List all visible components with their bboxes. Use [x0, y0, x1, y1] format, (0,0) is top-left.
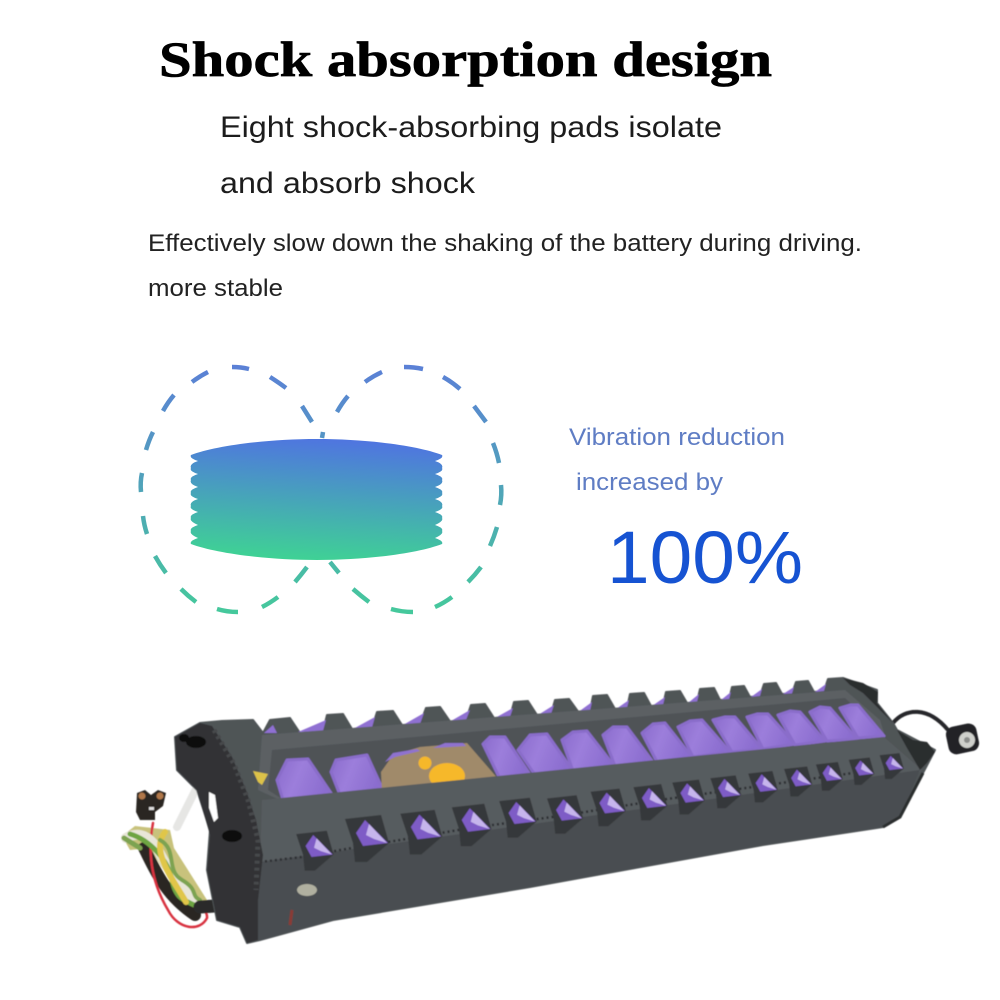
- description text: [148, 230, 862, 302]
- subtitle: eight shock-absorbing pads: and absorb shock: [220, 167, 476, 200]
- subtitle: eight shock-absorbing pads: Eight shock-absorbing pads isolate: [220, 111, 722, 144]
- description text: Effectively slow down the shaking of the battery during driving.: [148, 230, 862, 257]
- upper band shading: [258, 690, 885, 802]
- bead line: [260, 772, 860, 862]
- battery cell window: [277, 705, 884, 800]
- illustration: battery pack: [122, 678, 981, 943]
- title: Shock absorption design: [159, 31, 772, 87]
- description text: more stable: [148, 275, 283, 302]
- icon: dashed vibration rings: [141, 367, 501, 612]
- subtitle: eight shock-absorbing pads: [220, 111, 722, 200]
- callout: 100 percent: 100%: [607, 516, 803, 599]
- small label scuff: [297, 884, 317, 896]
- lower band with bead strip: [260, 737, 922, 865]
- left wire harness: [122, 787, 230, 927]
- callout: vibration reduction text: Vibration reduction: [569, 424, 785, 451]
- battery body: [175, 678, 935, 943]
- lower body: [240, 770, 920, 943]
- cell contact notches: [296, 753, 904, 871]
- red mark: [290, 910, 292, 925]
- callout: vibration reduction text: increased by: [576, 469, 724, 496]
- right end cap: [843, 678, 935, 827]
- left end cap: [175, 723, 263, 943]
- right cable and connector: [893, 712, 981, 756]
- icon: shock absorbing pad: [191, 439, 442, 560]
- upper cell slivers: [264, 684, 826, 733]
- left connector: [136, 790, 166, 820]
- wrapped cells with yellow pad: [253, 743, 500, 792]
- callout: vibration reduction text: [569, 424, 785, 496]
